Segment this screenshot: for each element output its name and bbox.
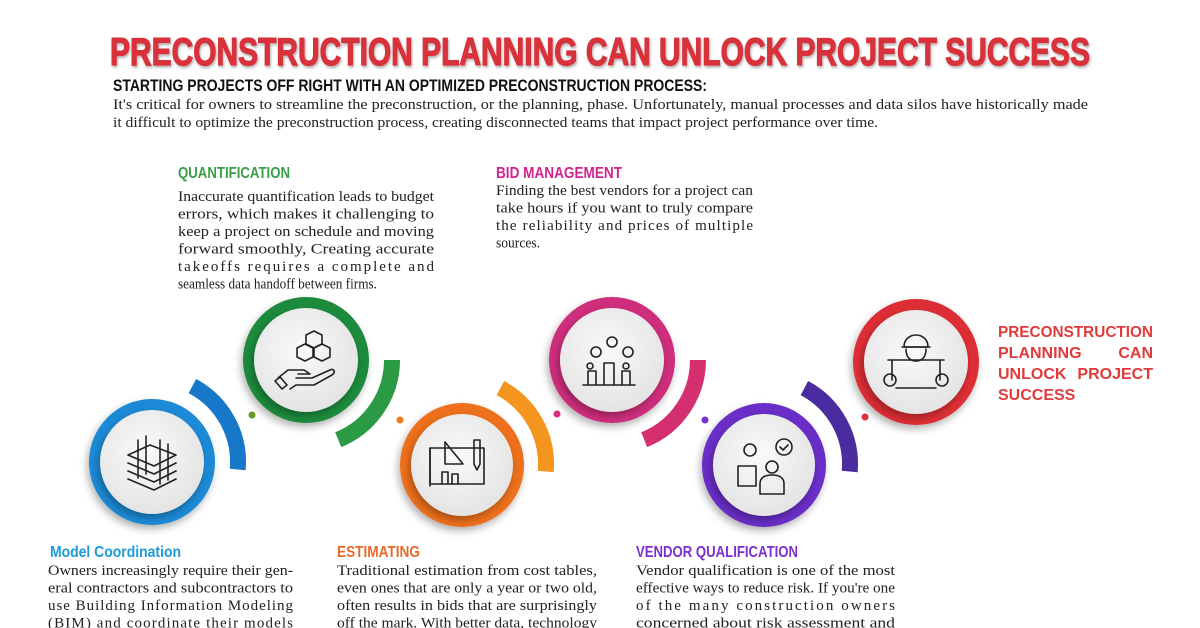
- intro text: It's critical for owners to streamline the preconstruction, or the planning, phase. Unfortunately, manual processes and data silos have historically made: [113, 97, 1088, 113]
- text block: conclusion: PLANNING: [998, 345, 1082, 362]
- circle: quantification: [243, 297, 369, 423]
- text block: model coordination: Owners increasingly require their gen-: [48, 563, 293, 579]
- icon: engineer with plans: [884, 335, 948, 388]
- text block: quantification: errors, which makes it challenging to: [178, 206, 434, 222]
- icon: bidders: [583, 337, 635, 385]
- text block: conclusion: PRECONSTRUCTION: [998, 324, 1153, 341]
- subtitle: STARTING PROJECTS OFF RIGHT WITH AN OPTIMIZED PRECONSTRUCTION PROCESS:: [113, 76, 707, 95]
- text block: vendor qualification: Vendor qualification is one of the most: [636, 563, 896, 579]
- text block: bid management: Finding the best vendors for a project can: [496, 183, 754, 199]
- circle: bid management: [549, 297, 675, 423]
- text block: conclusion: [998, 324, 1153, 404]
- text block: conclusion: SUCCESS: [998, 387, 1076, 404]
- text block: model coordination: Model Coordination: [50, 544, 181, 561]
- text block: model coordination: use Building Information Modeling: [48, 598, 294, 614]
- circle: vendor qualification: [702, 403, 826, 527]
- text block: bid management: sources.: [496, 236, 540, 252]
- text block: conclusion: PROJECT: [1077, 366, 1153, 383]
- text block: model coordination: eral contractors and subcontractors to: [48, 580, 293, 596]
- text block: quantification: keep a project on schedule and moving: [178, 224, 435, 240]
- text block: quantification: seamless data handoff between firms.: [178, 276, 377, 292]
- text block: bid management: BID MANAGEMENT: [496, 165, 622, 182]
- arcs: [192, 360, 850, 472]
- text block: vendor qualification: effective ways to reduce risk. If you're one: [636, 580, 895, 596]
- text block: bid management: the reliability and prices of multiple: [496, 218, 753, 234]
- text block: quantification: takeoffs requires a complete and: [178, 259, 434, 275]
- icon: hand with cubes: [275, 331, 334, 389]
- text block: quantification: forward smoothly, Creating accurate: [178, 242, 434, 258]
- text block: estimating: ESTIMATING: [337, 544, 420, 561]
- text block: vendor qualification: VENDOR QUALIFICATION: [636, 544, 798, 561]
- circle: conclusion: [853, 299, 979, 425]
- icon: blueprint: [430, 440, 484, 486]
- text block: quantification: Inaccurate quantification leads to budget: [178, 189, 435, 205]
- text block: bid management: [496, 165, 754, 252]
- text block: bid management: take hours if you want to truly compare: [496, 200, 753, 216]
- circle: model coordination: [89, 399, 215, 525]
- text block: estimating: often results in bids that are surprisingly: [337, 598, 598, 614]
- text block: quantification: [178, 165, 435, 292]
- text block: conclusion: UNLOCK: [998, 366, 1067, 383]
- text block: vendor qualification: [636, 544, 896, 628]
- text block: estimating: Traditional estimation from cost tables,: [337, 563, 597, 579]
- dots: [248, 410, 868, 424]
- circle: estimating: [400, 403, 524, 527]
- icon: vendor check: [738, 439, 792, 494]
- text block: model coordination: [48, 544, 294, 628]
- text block: vendor qualification: of the many construction owners: [636, 598, 895, 614]
- text block: quantification: QUANTIFICATION: [178, 165, 290, 182]
- intro text: [113, 97, 1088, 131]
- icon: building layers: [128, 436, 176, 490]
- intro text: it difficult to optimize the preconstruction process, creating disconnected teams that impact project performance over time.: [113, 115, 878, 131]
- text block: estimating: [337, 544, 598, 628]
- text block: estimating: even ones that are only a year or two old,: [337, 580, 597, 596]
- text block: conclusion: CAN: [1118, 345, 1153, 362]
